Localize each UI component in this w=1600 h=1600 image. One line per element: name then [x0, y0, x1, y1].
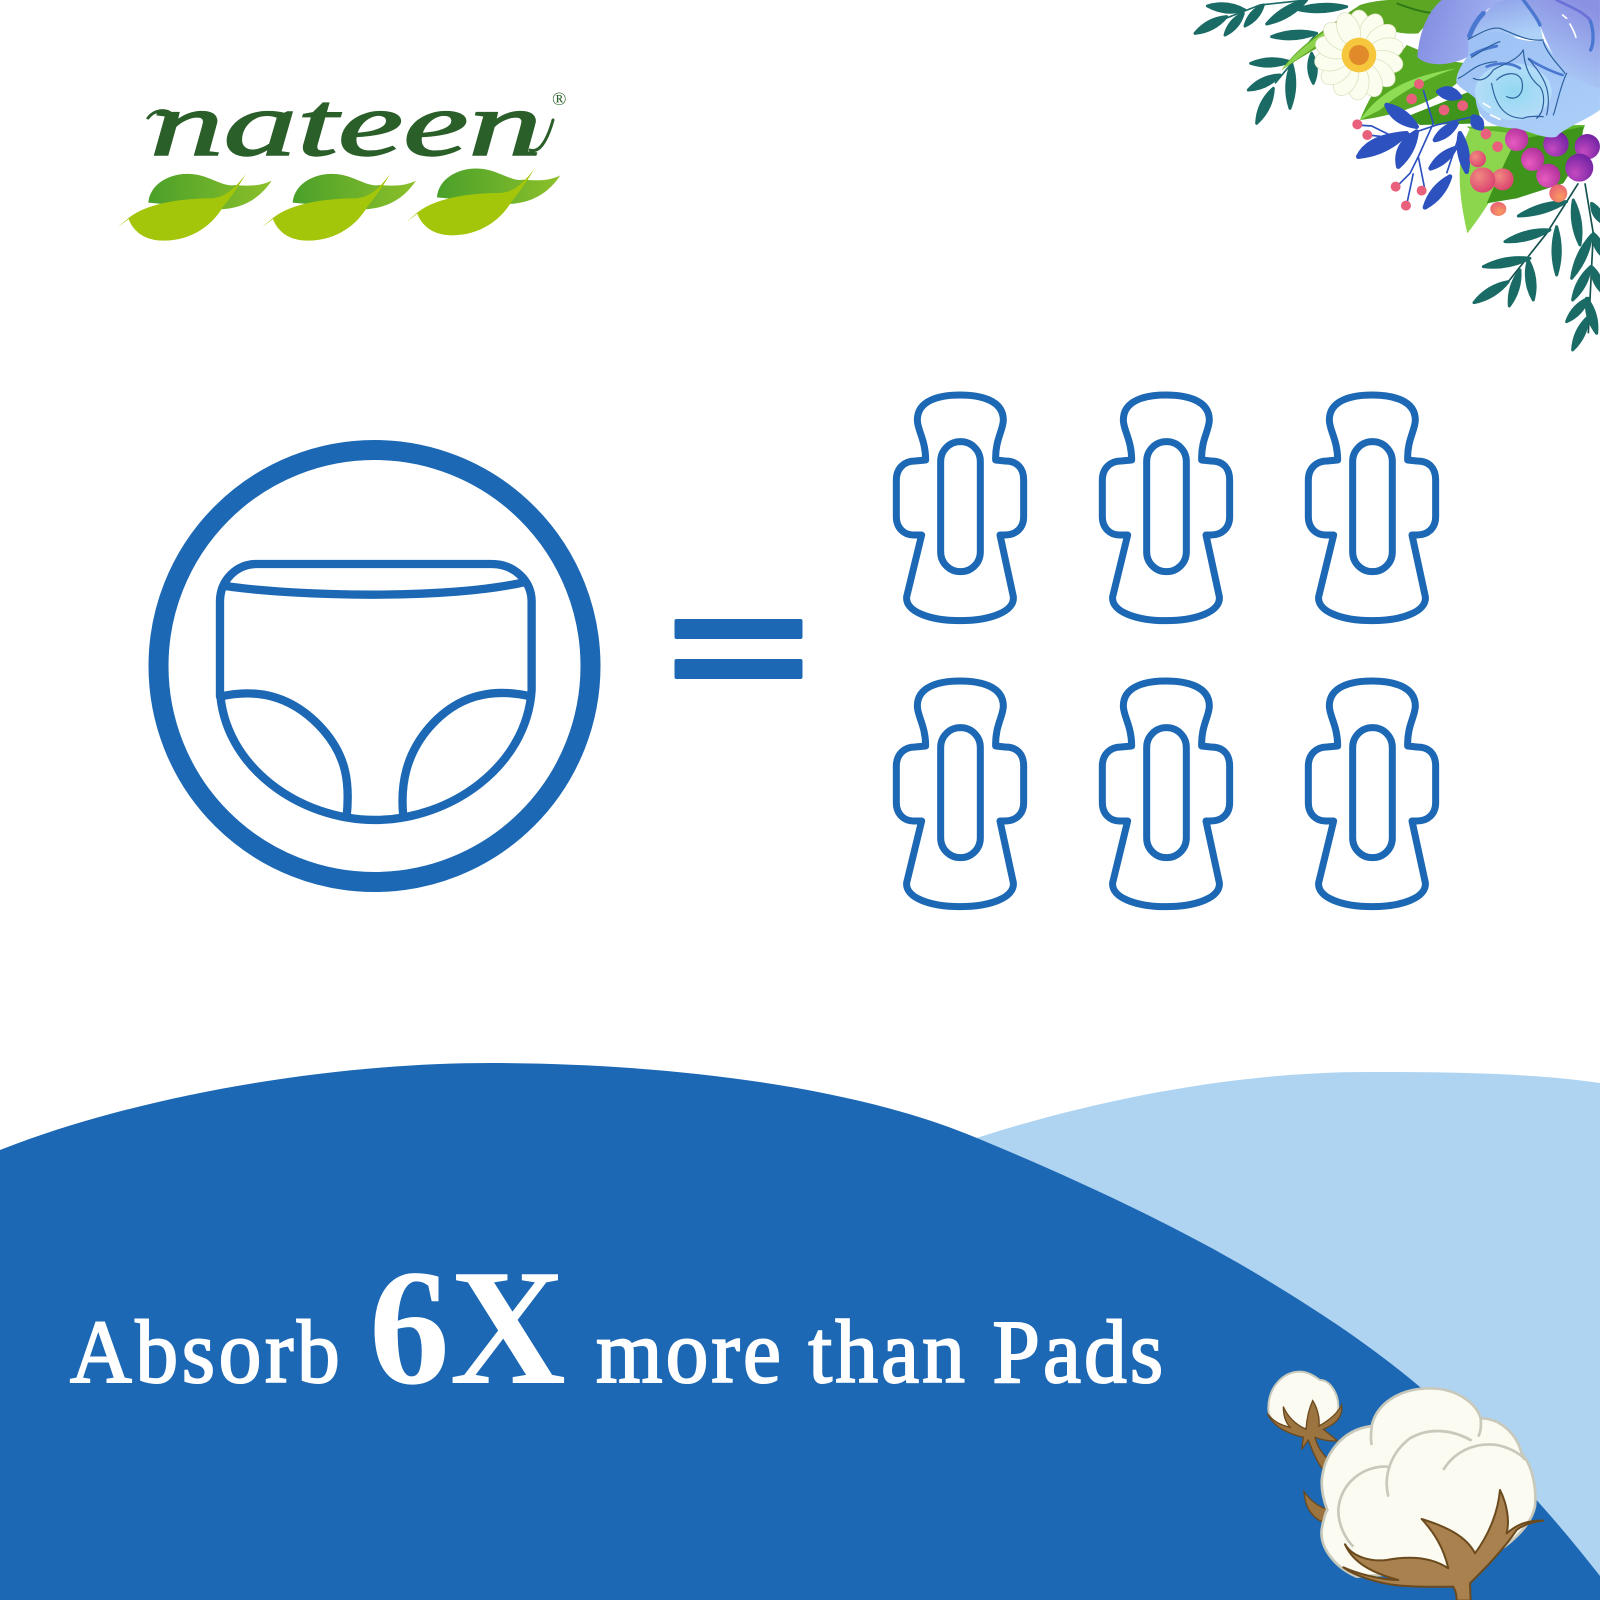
registered mark: ® — [552, 89, 566, 110]
headline: more than Pads: more than Pads — [596, 1302, 1163, 1401]
cotton bolls — [1267, 1372, 1543, 1600]
teal foliage — [1195, 0, 1600, 350]
panties icon in circle — [158, 450, 590, 882]
daisy flower — [1313, 9, 1405, 101]
pads grid: six sanitary pads — [896, 395, 1436, 907]
rose contour lines — [1458, 28, 1567, 118]
pad 3 — [1308, 395, 1436, 621]
pad 4 — [896, 681, 1024, 907]
logo: nateen — [117, 73, 566, 241]
floral corner decoration — [1195, 0, 1600, 350]
pad 6 — [1308, 681, 1436, 907]
headline text — [70, 1235, 1163, 1419]
logo wordmark: nateen — [150, 73, 542, 175]
pad 5 — [1102, 681, 1230, 907]
rose highlights — [1483, 15, 1576, 119]
headline: Absorb: Absorb — [70, 1302, 340, 1401]
pad 1 — [896, 395, 1024, 621]
light blue wave — [900, 1072, 1600, 1600]
green leaves — [1282, 0, 1585, 233]
large cotton boll — [1304, 1388, 1543, 1600]
rose petal shading — [1469, 0, 1593, 75]
dark blue wave — [0, 1063, 1600, 1600]
equals sign — [674, 619, 802, 679]
logo leaves — [117, 169, 560, 241]
panties outline — [220, 564, 532, 820]
pad 2 — [1102, 395, 1230, 621]
blue rose — [1417, 0, 1600, 137]
blue sprig — [1357, 88, 1482, 207]
berries — [1352, 79, 1600, 216]
small cotton boll — [1267, 1372, 1342, 1469]
headline: 6X: 6X — [369, 1235, 566, 1419]
circle ring — [158, 450, 590, 882]
